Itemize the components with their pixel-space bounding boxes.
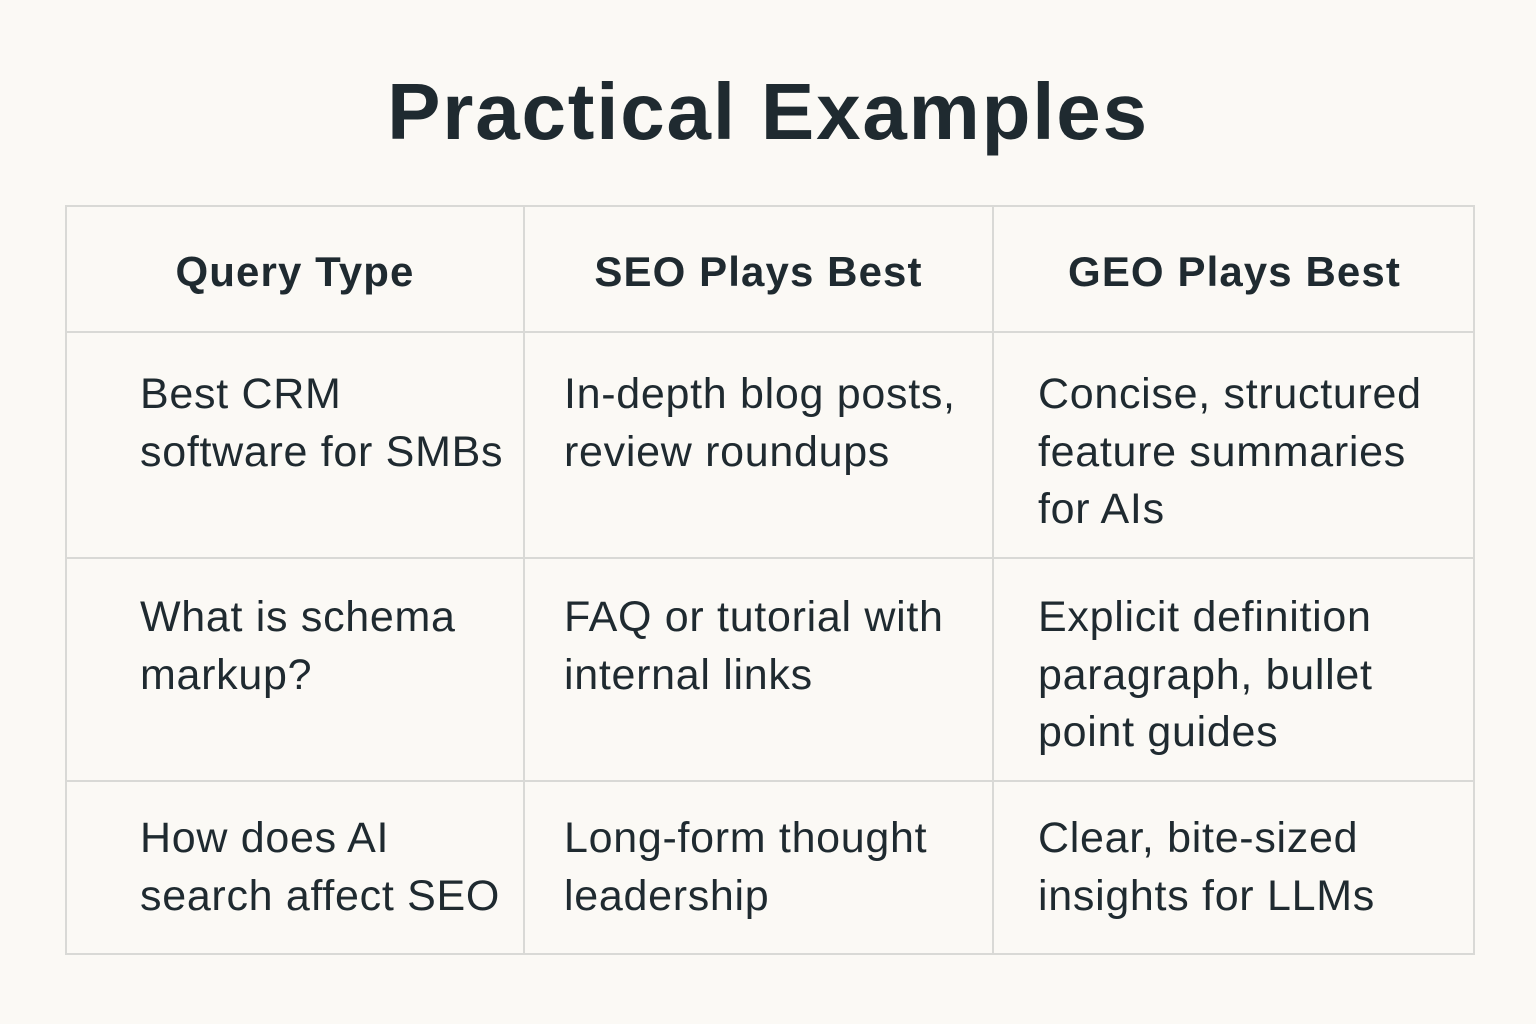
row 3 SEO: Long-form thought [564, 814, 927, 862]
table [65, 205, 1475, 955]
row 2 GEO: Explicit definition [1038, 593, 1372, 641]
row 3 SEO [564, 814, 927, 920]
header: SEO plays best: SEO Plays Best [594, 248, 923, 295]
row 1 SEO: review roundups [564, 428, 890, 476]
row 1 GEO [1038, 370, 1422, 533]
header: GEO plays best: GEO Plays Best [1068, 248, 1401, 295]
row 3 SEO: leadership [564, 872, 769, 920]
row 1 SEO [564, 370, 956, 476]
row 2 GEO: point guides [1038, 708, 1278, 756]
row 2 SEO: internal links [564, 650, 813, 698]
row 3 GEO: Clear, bite-sized [1038, 814, 1358, 862]
row 1 GEO: Concise, structured [1038, 370, 1422, 418]
row 2 GEO [1038, 593, 1373, 756]
header: query type: Query Type [176, 248, 414, 295]
row 2 query: What is schema [140, 593, 456, 641]
row 1 SEO: In-depth blog posts, [564, 370, 956, 418]
row 3 GEO [1038, 814, 1375, 920]
row 2 SEO: FAQ or tutorial with [564, 593, 944, 641]
row 1 query: Best CRM [140, 370, 342, 418]
title: Practical Examples [387, 67, 1149, 156]
row 1 GEO: for AIs [1038, 485, 1165, 533]
row 2 query [140, 593, 456, 698]
row 3 query [140, 814, 500, 920]
row 3 query: How does AI [140, 814, 389, 862]
row 1 GEO: feature summaries [1038, 428, 1406, 476]
row 2 GEO: paragraph, bullet [1038, 650, 1373, 698]
row 2 query: markup? [140, 650, 312, 698]
row 3 query: search affect SEO [140, 872, 500, 920]
row 1 query: software for SMBs [140, 428, 503, 476]
row 2 SEO [564, 593, 944, 698]
row 1 query [140, 370, 503, 476]
row 3 GEO: insights for LLMs [1038, 872, 1375, 920]
